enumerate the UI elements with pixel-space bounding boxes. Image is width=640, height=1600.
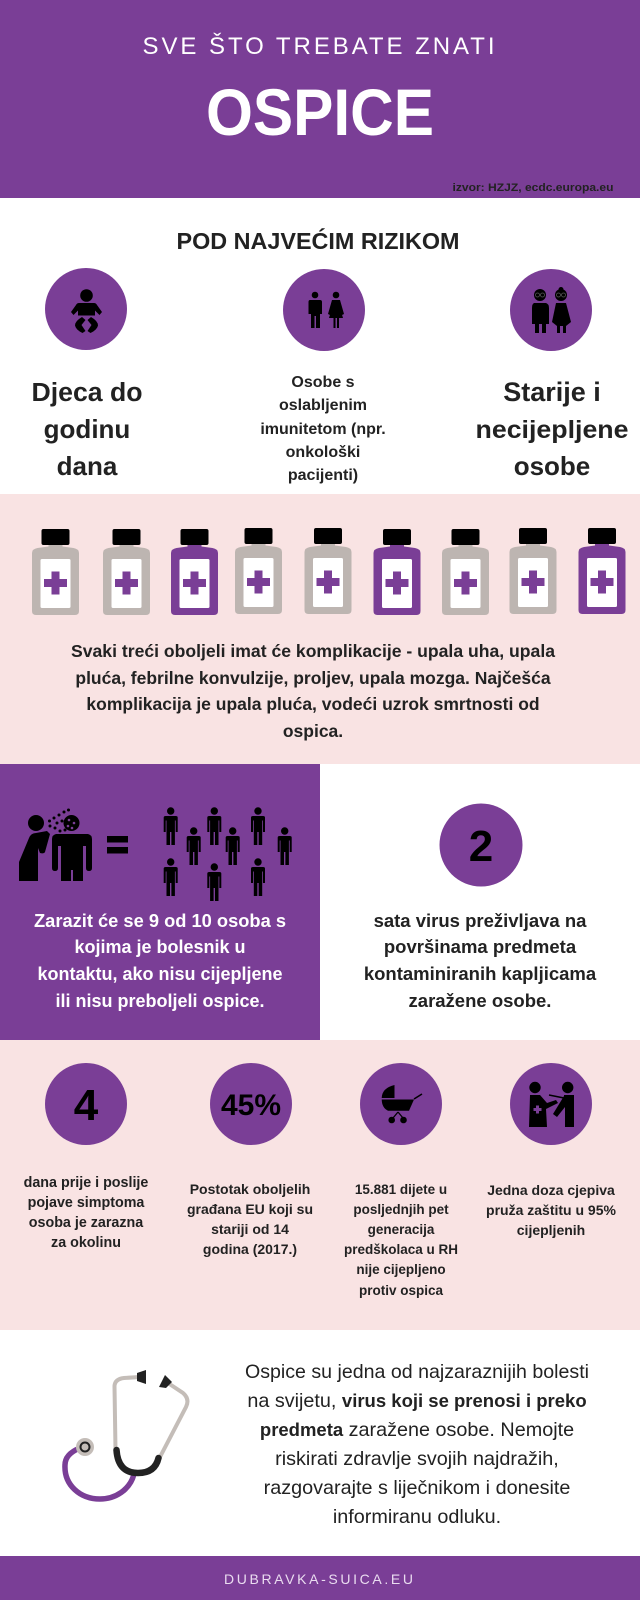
text: virus survival: zaražene osobe. xyxy=(409,990,551,1011)
text: vaccine protection: pruža zaštitu u 95% xyxy=(486,1202,617,1218)
text: immunocompromised xyxy=(260,374,386,484)
text: virus survival xyxy=(364,910,597,1011)
text: children: godinu xyxy=(44,414,130,444)
text: unvaccinated children: posljednjih pet xyxy=(353,1202,449,1217)
panel: virus survival xyxy=(320,764,640,1040)
number badge: 45%: 45% xyxy=(221,1089,281,1122)
icon: elderly couple xyxy=(510,269,592,351)
text: older patients xyxy=(187,1181,313,1257)
text: elderly and unvaccinated: necijepljene xyxy=(476,416,629,444)
text: unvaccinated children xyxy=(344,1182,458,1298)
text: unvaccinated children: nije cijepljeno xyxy=(356,1262,446,1277)
text: infection rate: kojima je bolesnik u xyxy=(74,937,246,957)
text: infection rate: ili nisu preboljeli ospice. xyxy=(55,991,265,1011)
text: virus survival: površinama predmeta xyxy=(384,936,577,957)
text: virus survival: kontaminiranih kapljicama xyxy=(364,963,597,984)
heading: risk groups: POD NAJVEĆIM RIZIKOM xyxy=(176,227,460,254)
title: OSPICE xyxy=(206,75,434,149)
pictogram: one in three bottles xyxy=(32,528,626,615)
panel: risk groups xyxy=(0,198,640,494)
text: complications: pluća, febrilne konvulzije, proljev, upala mozga. Najčešća xyxy=(75,668,551,688)
text: virus survival: sata virus preživljava na xyxy=(374,910,587,931)
text: contagious days: pojave simptoma xyxy=(28,1195,145,1211)
pictogram: nine people xyxy=(164,807,292,901)
text: unvaccinated children: generacija xyxy=(368,1222,435,1237)
text: closing message xyxy=(245,1361,589,1528)
number badge: 2 xyxy=(440,804,522,886)
text: contagious days xyxy=(24,1175,148,1251)
icon: baby xyxy=(45,268,127,350)
text: vaccine protection: Jedna doza cjepiva xyxy=(487,1182,615,1198)
text: elderly and unvaccinated xyxy=(476,377,629,481)
text: vaccine protection: cijepljenih xyxy=(517,1222,585,1238)
text: older patients: stariji od 14 xyxy=(211,1221,289,1237)
icon: sick person infecting another xyxy=(19,808,92,881)
panel: complications xyxy=(0,494,640,764)
text: immunocompromised: onkološki xyxy=(286,444,360,461)
text: immunocompromised: oslabljenim xyxy=(279,397,367,414)
text: immunocompromised: Osobe s xyxy=(291,374,355,391)
text: unvaccinated children: protiv ospica xyxy=(359,1283,443,1298)
text: vaccine protection xyxy=(486,1182,617,1238)
text: closing message: predmeta zaražene osobe. Nemojte xyxy=(260,1419,574,1441)
text: complications: Svaki treći oboljeli imat će komplikacije - upala uha, upala xyxy=(71,641,555,661)
icon: man and woman xyxy=(283,269,365,351)
text: complications xyxy=(71,641,555,741)
icon: stethoscope xyxy=(65,1370,187,1499)
text: closing message: riskirati zdravlje svojih najdražih, xyxy=(275,1448,559,1470)
text: website: DUBRAVKA-SUICA.EU xyxy=(224,1571,416,1587)
text: unvaccinated children: predškolaca u RH xyxy=(344,1242,458,1257)
source note: izvor: HZJZ, ecdc.europa.eu xyxy=(452,182,614,194)
text: children: Djeca do xyxy=(32,379,142,407)
panel: facts xyxy=(0,1040,640,1330)
text: closing message: razgovarajte s liječnikom i donesite xyxy=(264,1477,570,1499)
text: elderly and unvaccinated: Starije i xyxy=(503,377,601,407)
icon: pram xyxy=(360,1063,442,1145)
text: older patients: Postotak oboljelih xyxy=(190,1181,310,1197)
text: elderly and unvaccinated: osobe xyxy=(514,451,590,481)
text: complications: ospica. xyxy=(283,721,343,741)
text: older patients: godina (2017.) xyxy=(203,1241,297,1257)
panel: contagion xyxy=(0,764,320,1040)
text: closing message: informiranu odluku. xyxy=(333,1506,501,1528)
text: closing message: Ospice su jedna od najzaraznijih bolesti xyxy=(245,1361,589,1383)
panel: closing message xyxy=(0,1330,640,1556)
text: children xyxy=(32,379,142,481)
text: older patients: građana EU koji su xyxy=(187,1201,313,1217)
text: immunocompromised: pacijenti) xyxy=(288,467,358,484)
number badge: 4 xyxy=(45,1063,127,1145)
text: children: dana xyxy=(57,451,118,481)
text: infection rate: kontaktu, ako nisu cijepljene xyxy=(37,964,283,984)
text: infection rate xyxy=(34,911,286,1011)
text: contagious days: dana prije i poslije xyxy=(24,1175,148,1191)
icon: equals sign xyxy=(107,836,128,854)
text: immunocompromised: imunitetom (npr. xyxy=(260,421,386,438)
subtitle: SVE ŠTO TREBATE ZNATI xyxy=(142,32,498,60)
panel: footer xyxy=(0,1556,640,1600)
number badge: 4: 4 xyxy=(74,1081,99,1130)
number badge: 2: 2 xyxy=(469,822,493,871)
text: infection rate: Zarazit će se 9 od 10 osoba s xyxy=(34,911,286,931)
number badge: 45% xyxy=(210,1063,292,1145)
text: unvaccinated children: 15.881 dijete u xyxy=(355,1182,447,1197)
text: contagious days: za okolinu xyxy=(51,1235,121,1251)
text: closing message: na svijetu, virus koji se prenosi i preko xyxy=(247,1390,587,1412)
panel: header xyxy=(0,0,640,198)
icon: vaccination xyxy=(510,1063,592,1145)
text: complications: komplikacija je upala pluća, vodeći uzrok smrtnosti od xyxy=(86,694,540,714)
text: contagious days: osoba je zarazna xyxy=(29,1215,144,1231)
